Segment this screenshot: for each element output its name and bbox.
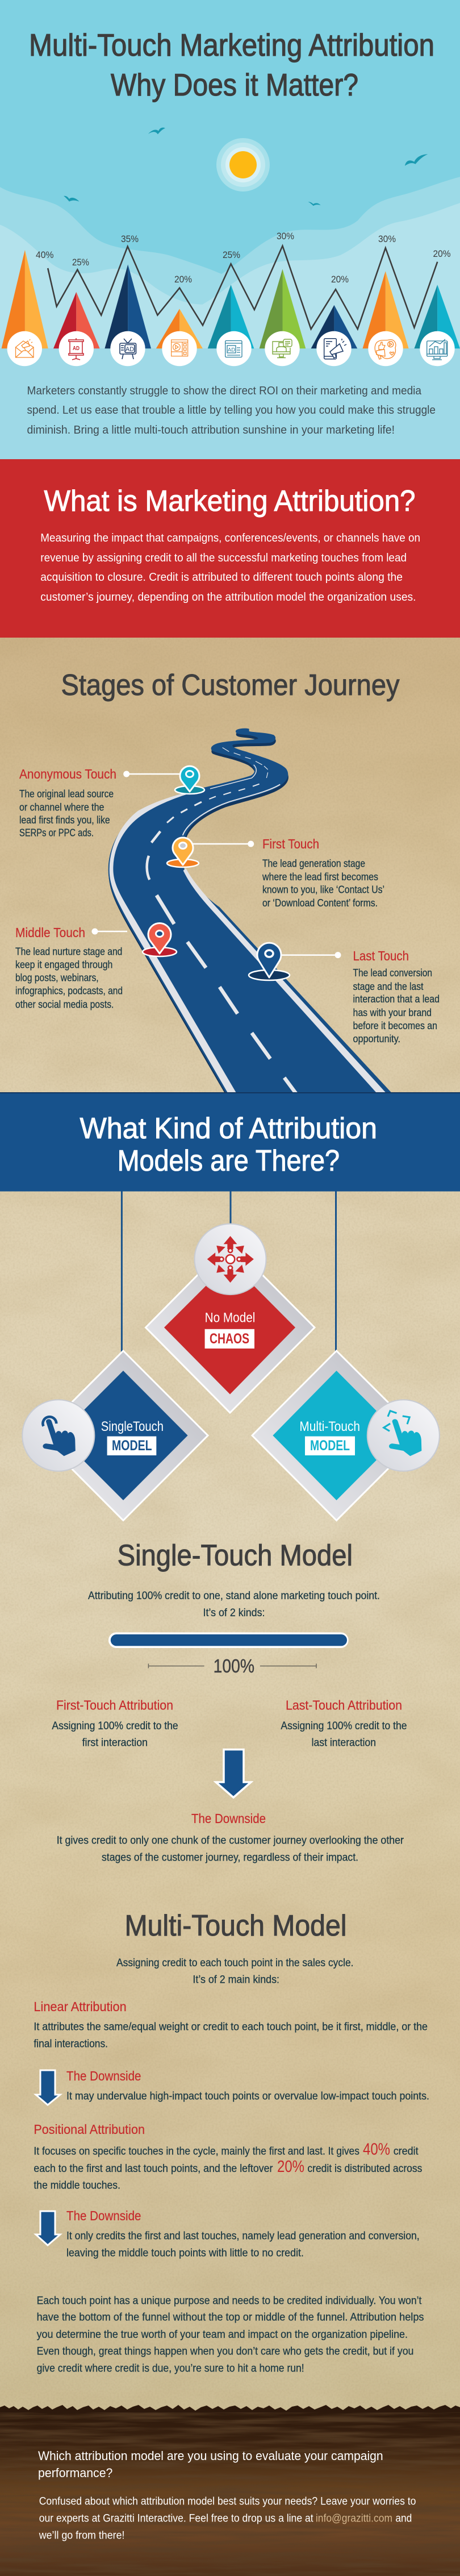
icon: analytics monitor [420, 331, 455, 366]
text block: last-touch attribution: Assigning 100% credit to the [281, 1720, 407, 1732]
leader line: first touch [192, 841, 254, 847]
text block: first touch: The lead generation stage [262, 858, 365, 869]
text block: middle touch: blog posts, webinars, [15, 972, 99, 983]
chart: percentage zigzag line: 40% [36, 249, 53, 260]
panel: what kind of attribution models band [0, 1092, 460, 1191]
text block: single-touch downside: stages of the customer journey, regardless of their impact. [102, 1851, 358, 1864]
text block: single-touch downside: It gives credit to only one chunk of the customer journey overlooking the other [57, 1835, 404, 1847]
text block: first-touch attribution: Assigning 100% credit to the [52, 1720, 178, 1732]
text block: middle touch [15, 925, 123, 1010]
text block: single-touch downside: The Downside [191, 1811, 266, 1826]
diagram: multi touch model [252, 1351, 440, 1521]
chart: mountain peaks [2, 250, 460, 348]
text block: last touch: The lead conversion [353, 967, 432, 979]
text block: attribution definition: acquisition to closure. Credit is attributed to different touch points along the [40, 571, 403, 584]
text block: first-touch attribution: First-Touch Attribution [56, 1698, 173, 1713]
illustration: winding road [108, 729, 394, 1098]
text block: footer call to action [39, 2496, 416, 2542]
text block: hero intro: Marketers constantly struggle to show the direct ROI on their marketing and media [27, 385, 422, 397]
icon: chaos arrows [195, 1224, 266, 1295]
chart: percentage zigzag line: 20% [174, 274, 192, 285]
text block: middle touch: keep it engaged through [15, 959, 112, 971]
text block: footer call to action: and [395, 2513, 412, 2525]
icon: video player [162, 331, 197, 366]
text block: footer call to action: Confused about which attribution model best suits your needs? Leave your worries to [39, 2496, 416, 2508]
text block: first-touch attribution: first interaction [82, 1737, 148, 1749]
text block: positional downside: leaving the middle touch points with little to no credit. [66, 2248, 304, 2259]
connector lines [122, 1191, 336, 1354]
pin: last touch [249, 943, 290, 980]
chart: percentage zigzag line: 30% [277, 231, 294, 242]
text block: anonymous touch: The original lead source [19, 788, 114, 800]
text block: last touch: opportunity. [353, 1033, 400, 1044]
text block: hero intro [27, 385, 436, 436]
icon: pointing hand [22, 1400, 94, 1471]
leader line: last touch [281, 952, 341, 958]
text block: single-touch intro: It’s of 2 kinds: [203, 1607, 265, 1619]
chart: percentage zigzag line [36, 231, 451, 329]
text block: linear attribution: final interactions. [34, 2038, 108, 2050]
text block: positional attribution: Positional Attribution [34, 2122, 145, 2137]
text block: positional attribution: the middle touches. [34, 2180, 120, 2192]
diagram: no model chaos [145, 1224, 315, 1413]
icon: web advert: AD [228, 347, 235, 353]
text block: middle touch: other social media posts. [15, 999, 114, 1010]
icon: webinar monitor [265, 331, 300, 366]
icon: multi touch hand [367, 1400, 440, 1471]
diagram: single touch model: MODEL [112, 1438, 152, 1454]
text block: first touch: First Touch [262, 837, 319, 851]
text block: positional attribution: credit [394, 2146, 419, 2157]
text block: middle touch: Middle Touch [15, 925, 85, 940]
text block: last touch: has with your brand [353, 1007, 432, 1018]
text block: first touch: or ‘Download Content’ forms. [262, 897, 378, 909]
text block: closing paragraph: Each touch point has a unique purpose and needs to be credited individually. You won’t [37, 2295, 422, 2307]
text block: linear downside: The Downside [66, 2069, 141, 2083]
icons: birds [64, 128, 428, 206]
diagram: multi touch model: MODEL [310, 1438, 350, 1454]
text block: linear attribution: It attributes the same/equal weight or credit to each touch point, be it first, middle, or the [34, 2021, 428, 2033]
text block: last touch: Last Touch [353, 948, 409, 963]
arrow: down to the downside [216, 1750, 251, 1797]
text block: middle touch: infographics, podcasts, and [15, 985, 123, 997]
text block: linear attribution [34, 1999, 428, 2050]
text block: attribution definition [40, 532, 420, 604]
pin: middle touch [143, 923, 177, 956]
diagram: no model chaos: CHAOS [210, 1331, 249, 1347]
chart: percentage zigzag line: 25% [223, 249, 240, 260]
text block: first touch: known to you, like ‘Contact Us’ [262, 884, 384, 895]
text block: anonymous touch [19, 767, 116, 839]
diagram: single touch model [22, 1351, 208, 1521]
icon: sun [216, 138, 270, 192]
text block: hero intro: spend. Let us ease that trouble a little by telling you how you could make this struggle [27, 404, 436, 417]
text block: closing paragraph [37, 2295, 424, 2375]
leader line: middle touch [92, 929, 127, 934]
text block: anonymous touch: Anonymous Touch [19, 767, 116, 781]
text block: footer call to action: info@grazitti.com [316, 2513, 392, 2525]
text block: last-touch attribution [281, 1698, 407, 1749]
text block: multi-touch intro [116, 1957, 353, 1986]
pin: anonymous touch [175, 766, 204, 794]
text block: positional attribution [34, 2122, 422, 2192]
leader line: anonymous touch [123, 771, 183, 777]
text block: positional downside: It only credits the first and last touches, namely lead generation and conversion, [66, 2230, 420, 2242]
panel: what kind of attribution models band: What Kind of Attribution [80, 1112, 377, 1145]
text block: anonymous touch: or channel where the [19, 801, 104, 813]
text block: closing paragraph: you determine the true worth of your team and impact on the organization pipeline. [37, 2329, 408, 2341]
heading: what is marketing attribution: What is Marketing Attribution? [44, 485, 416, 518]
text block: attribution definition: revenue by assigning credit to all the successful marketing touches from lead [40, 552, 407, 564]
text block: last touch: before it becomes an [353, 1020, 437, 1031]
icon: envelope megaphone [7, 331, 42, 366]
heading: multi-touch model: Multi-Touch Model [125, 1909, 346, 1942]
text block: attribution definition: customer’s journey, depending on the attribution model the organization uses. [40, 591, 416, 604]
text block: anonymous touch: lead first finds you, like [19, 814, 110, 826]
chart: percentage zigzag line: 20% [433, 248, 451, 259]
text block: hero intro: diminish. Bring a little multi-touch attribution sunshine in your marketing life! [27, 424, 395, 436]
title: Why Does it Matter? [111, 67, 358, 102]
chart: percentage zigzag line: 30% [378, 234, 396, 244]
text block: first touch: where the lead first becomes [262, 871, 378, 883]
text block: multi-touch intro: Assigning credit to each touch point in the sales cycle. [116, 1957, 353, 1969]
text block: last touch: interaction that a lead [353, 993, 440, 1005]
heading: single-touch model: Single-Touch Model [118, 1539, 353, 1572]
panel: dark wood footer [0, 2405, 460, 2576]
text block: positional attribution: 40% [363, 2140, 390, 2158]
text block: linear downside: It may undervalue high-impact touch points or overvalue low-impact touch points. [66, 2091, 429, 2103]
icon: web advert [216, 331, 252, 366]
text block: positional downside [66, 2208, 420, 2259]
text block: closing paragraph: give credit where credit is due, you’re sure to hit a home run! [37, 2363, 304, 2375]
arrow: linear downside [36, 2070, 60, 2105]
text block: first touch [262, 837, 384, 909]
icon: phone with megaphone [316, 331, 352, 366]
chart: percentage zigzag line: 35% [121, 234, 139, 244]
pin: first touch [167, 838, 199, 867]
text block: last touch [353, 948, 440, 1044]
text block: footer question: Which attribution model are you using to evaluate your campaign [38, 2449, 383, 2463]
text block: multi-touch intro: It’s of 2 main kinds: [193, 1974, 279, 1986]
text block: footer question [38, 2449, 383, 2480]
icon: social media mix [368, 331, 403, 366]
text block: single-touch intro: Attributing 100% credit to one, stand alone marketing touch point. [88, 1590, 380, 1602]
text block: single-touch downside [57, 1811, 404, 1864]
text block: footer call to action: our experts at Grazitti Interactive. Feel free to drop us a line at [39, 2513, 313, 2525]
panel: what is marketing attribution [0, 459, 460, 638]
text block: positional downside: The Downside [66, 2208, 141, 2223]
text block: positional attribution: credit is distributed across [307, 2163, 422, 2175]
chart: percentage zigzag line: 25% [72, 257, 89, 268]
text block: anonymous touch: SERPs or PPC ads. [19, 827, 94, 839]
text block: middle touch: The lead nurture stage and [15, 946, 122, 958]
bar chart: 100% credit bar: 100% [214, 1655, 254, 1676]
text block: last-touch attribution: Last-Touch Attribution [286, 1698, 402, 1713]
icon: television: AD [126, 346, 134, 353]
text block: positional attribution: each to the first and last touch points, and the leftover [34, 2163, 273, 2175]
panel: what kind of attribution models band: Models are There? [118, 1145, 340, 1177]
text block: linear attribution: Linear Attribution [34, 1999, 127, 2014]
text block: single-touch intro [88, 1590, 380, 1619]
panel: hero sky background [0, 0, 460, 459]
text block: positional attribution: 20% [277, 2158, 304, 2176]
text block: closing paragraph: Even though, great things happen when you don’t care who gets the credit, but if you [37, 2345, 413, 2357]
text block: footer question: performance? [38, 2466, 112, 2480]
text block: attribution definition: Measuring the impact that campaigns, conferences/events, or channels have on [40, 532, 420, 544]
text block: last-touch attribution: last interaction [312, 1737, 376, 1749]
heading: stages of customer journey: Stages of Customer Journey [61, 669, 400, 702]
icon: advertising board [59, 331, 94, 366]
diagram: single touch model: SingleTouch [101, 1419, 164, 1434]
chart: percentage zigzag line: 20% [331, 274, 349, 285]
title [29, 27, 434, 102]
text block: closing paragraph: have the bottom of the funnel without the top or middle of the funnel. Attribution helps [37, 2312, 424, 2324]
diagram: no model chaos: No Model [205, 1310, 255, 1325]
bar chart: 100% credit bar [108, 1632, 349, 1676]
text block: footer call to action: we’ll go from there! [39, 2530, 124, 2542]
panel: paper texture background [0, 638, 460, 2411]
text block: first-touch attribution [52, 1698, 178, 1749]
diagram: multi touch model: Multi-Touch [299, 1419, 360, 1434]
arrow: positional downside [36, 2211, 60, 2245]
text block: positional attribution: It focuses on specific touches in the cycle, mainly the first and last. It gives [34, 2146, 359, 2157]
text block: linear downside [66, 2069, 429, 2103]
text block: last touch: stage and the last [353, 981, 424, 992]
icon: advertising board: AD [73, 346, 80, 352]
icon: television [110, 331, 145, 366]
